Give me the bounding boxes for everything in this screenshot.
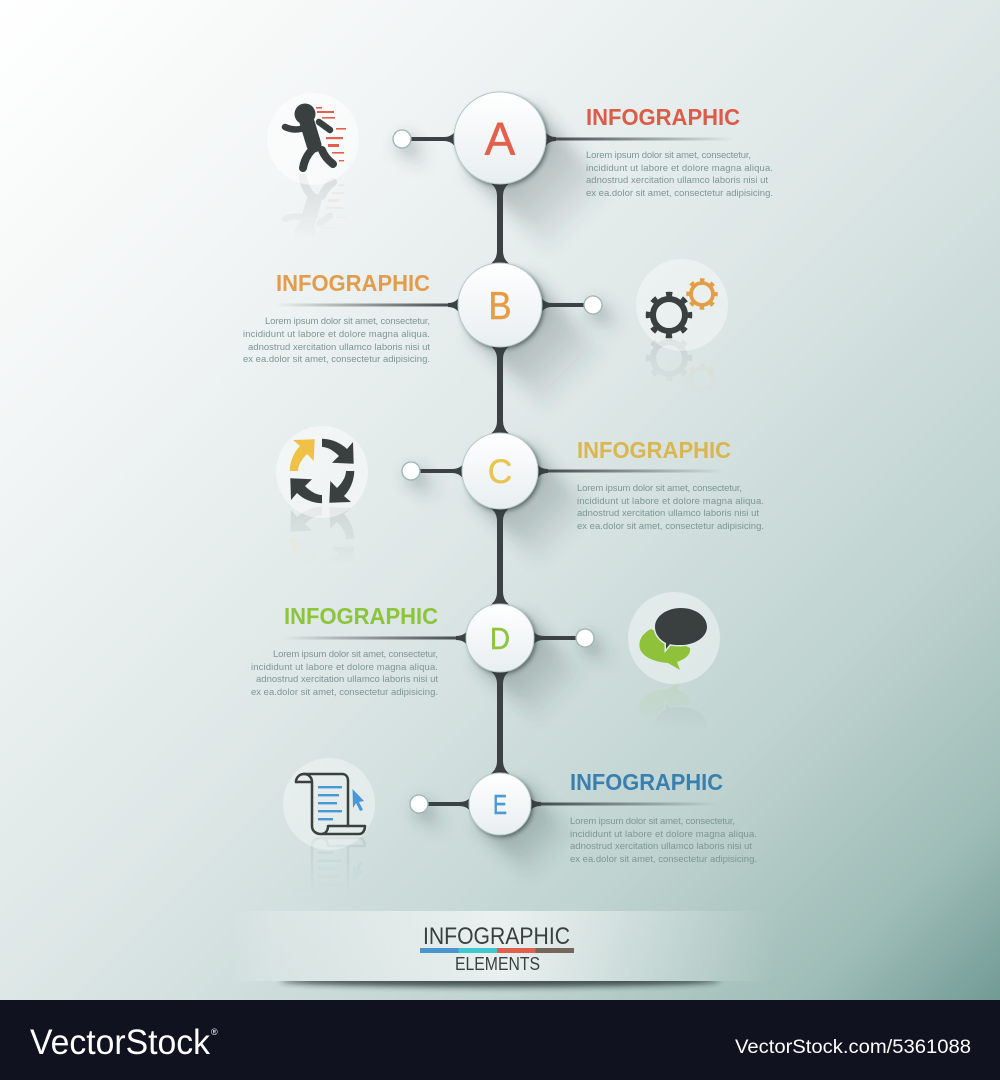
step A text: Lorem ipsum dolor sit amet, consectetur, <box>586 150 751 161</box>
step E text: Lorem ipsum dolor sit amet, consectetur, <box>570 816 735 827</box>
step D text: INFOGRAPHIC <box>284 603 438 629</box>
step C text: incididunt ut labore et dolore magna aliqua. <box>577 496 764 507</box>
step A text: incididunt ut labore et dolore magna aliqua. <box>586 163 773 174</box>
step C connectors <box>402 462 724 480</box>
footer url: VectorStock.com/5361088 <box>735 1037 971 1058</box>
registered mark: ® <box>211 1027 218 1037</box>
step B node <box>458 263 544 349</box>
step D connectors <box>283 629 594 647</box>
step E text: incididunt ut labore et dolore magna aliqua. <box>570 829 757 840</box>
step A text: INFOGRAPHIC <box>586 104 740 130</box>
step B text <box>243 270 430 365</box>
step C text: ex ea.dolor sit amet, consectetur adipisicing. <box>577 521 764 532</box>
step C text: INFOGRAPHIC <box>577 437 731 463</box>
step C text: Lorem ipsum dolor sit amet, consectetur, <box>577 483 742 494</box>
long diagonal shadows <box>397 106 622 878</box>
banner subtitle: ELEMENTS <box>455 953 540 974</box>
step B text: incididunt ut labore et dolore magna aliqua. <box>243 329 430 340</box>
banner title: INFOGRAPHIC <box>423 923 570 950</box>
step A text: ex ea.dolor sit amet, consectetur adipisicing. <box>586 188 773 199</box>
step B text: ex ea.dolor sit amet, consectetur adipisicing. <box>243 354 430 365</box>
step D node: D <box>490 621 510 656</box>
step D text: ex ea.dolor sit amet, consectetur adipisicing. <box>251 687 438 698</box>
step A connectors <box>393 130 734 148</box>
step E text: INFOGRAPHIC <box>570 769 723 795</box>
banner shadow <box>278 981 722 992</box>
step C text: adnostrud xercitation ullamco laboris nisi ut <box>577 508 759 519</box>
step C text <box>577 437 764 532</box>
step A node: A <box>485 113 516 165</box>
icon: gears <box>636 259 728 370</box>
step D text: Lorem ipsum dolor sit amet, consectetur, <box>273 649 438 660</box>
icon: running man <box>282 104 346 218</box>
step D node <box>466 604 536 674</box>
step B connectors <box>275 296 602 314</box>
step B text: Lorem ipsum dolor sit amet, consectetur, <box>265 316 430 327</box>
footer bar <box>0 1000 1000 1080</box>
step E text <box>570 769 757 865</box>
step B node: B <box>488 285 512 328</box>
step E node: E <box>493 789 507 820</box>
step E text: adnostrud xercitation ullamco laboris nisi ut <box>570 841 752 852</box>
icon: speech bubbles <box>628 592 720 706</box>
step E text: ex ea.dolor sit amet, consectetur adipisicing. <box>570 854 757 865</box>
timeline stem <box>489 180 511 780</box>
step E node <box>469 773 533 837</box>
step B text: INFOGRAPHIC <box>276 270 430 296</box>
step B text: adnostrud xercitation ullamco laboris nisi ut <box>248 342 430 353</box>
colour bar <box>420 948 574 953</box>
step A node <box>454 92 548 186</box>
step A text <box>586 104 773 199</box>
step C node: C <box>488 453 512 491</box>
footer logo: VectorStock <box>30 1023 210 1062</box>
step D text <box>251 603 438 698</box>
step A text: adnostrud xercitation ullamco laboris nisi ut <box>586 175 768 186</box>
icon: cycle arrows <box>276 426 368 540</box>
banner <box>230 911 775 981</box>
step C node <box>462 433 540 511</box>
step D text: incididunt ut labore et dolore magna aliqua. <box>251 662 438 673</box>
step E connectors <box>410 795 717 813</box>
step D text: adnostrud xercitation ullamco laboris nisi ut <box>256 674 438 685</box>
icon: scroll with cursor <box>283 758 375 866</box>
